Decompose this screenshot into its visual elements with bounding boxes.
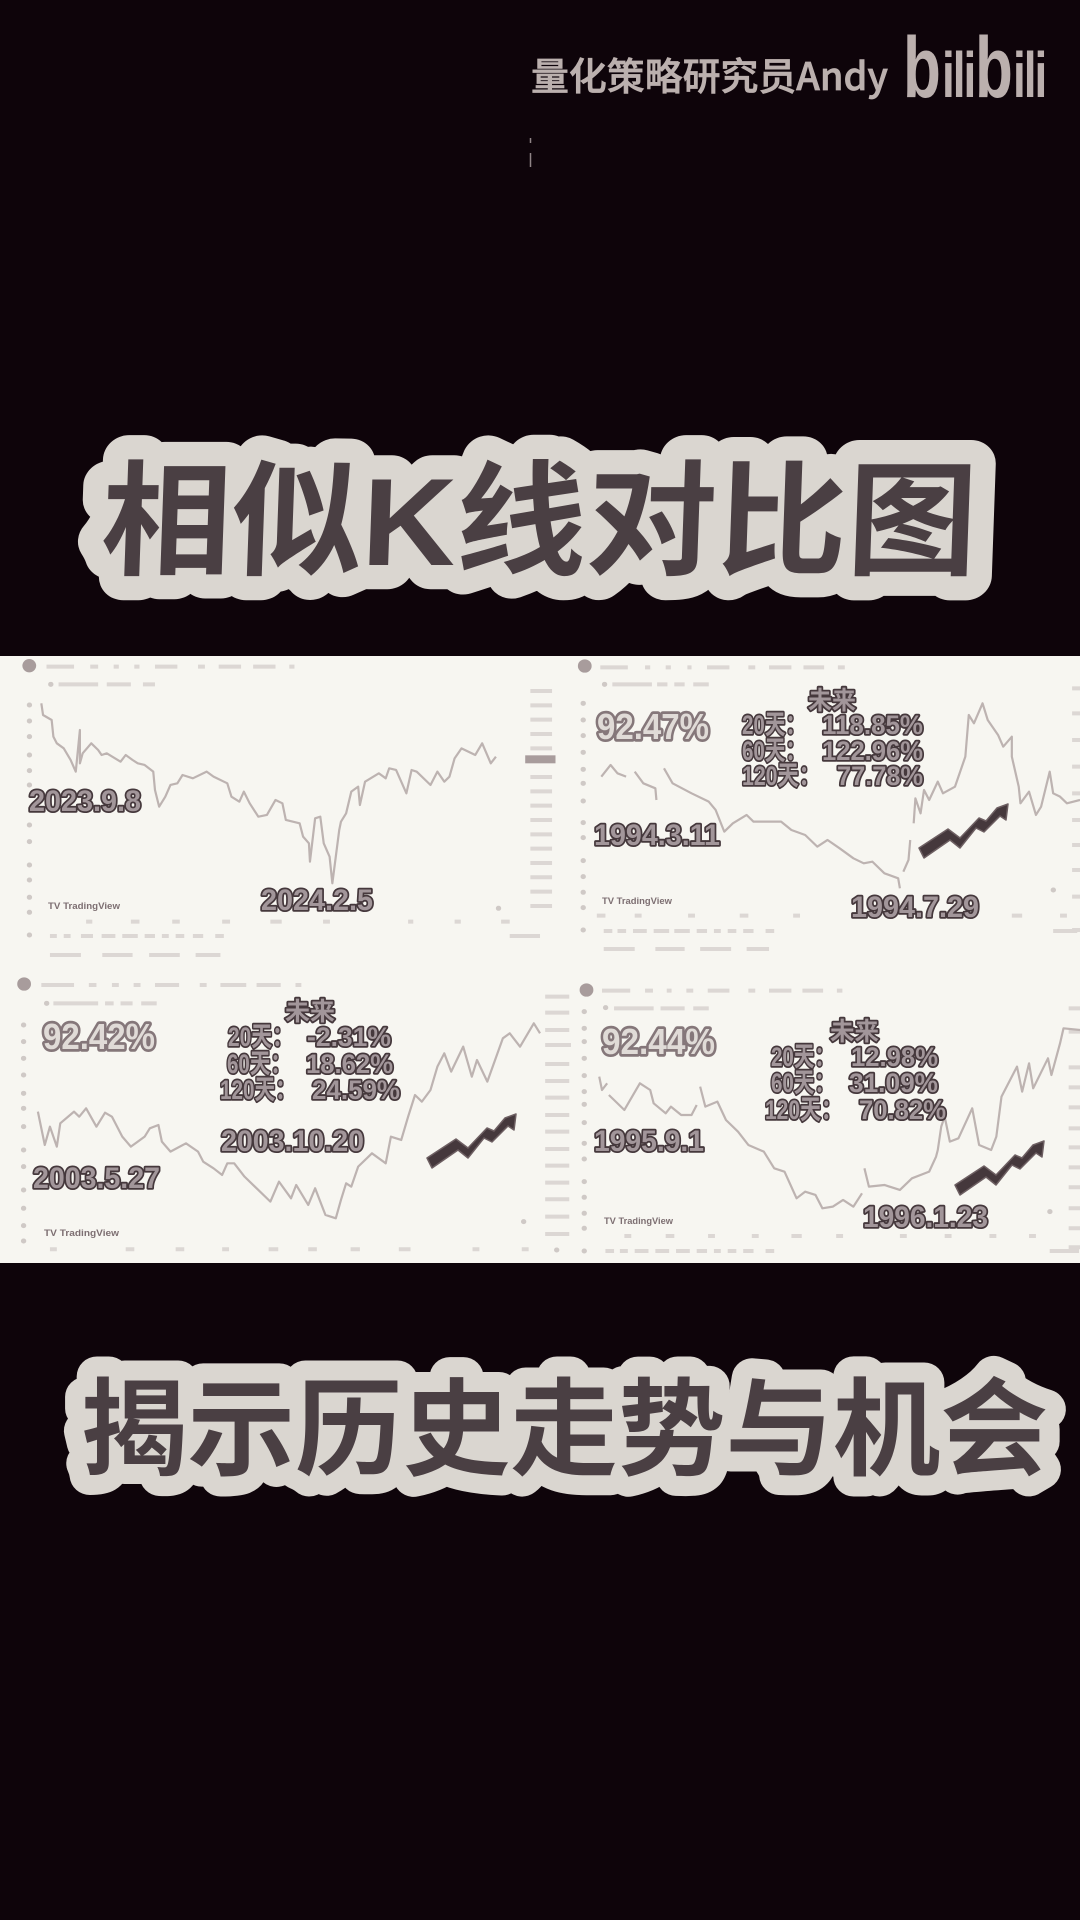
icon: bilibili logo: ili (1013, 40, 1045, 111)
icon: bilibili logo: ili (942, 40, 974, 111)
future returns table: 120天： (765, 1095, 842, 1125)
future returns table (765, 1018, 946, 1125)
future returns table: 120天： (742, 761, 820, 791)
date label: start: 1994.3.11 (594, 819, 720, 852)
future returns table: 122.96% (822, 736, 923, 766)
chart 4 interface chrome (545, 983, 1080, 1251)
future returns table (220, 998, 400, 1105)
future returns table: 70.82% (859, 1095, 946, 1125)
future returns table: 120天： (220, 1075, 296, 1105)
TradingView mark: TV TradingView (48, 901, 121, 911)
future returns table: 未来 (830, 1018, 879, 1046)
future returns table: 60天： (227, 1049, 291, 1079)
future returns table: 20天： (228, 1022, 293, 1052)
future returns table: 未来 (808, 687, 856, 715)
date label: end: 2003.10.20 (221, 1125, 364, 1158)
panel: chart comparison (0, 656, 1080, 1263)
date label: start: 1995.9.1 (594, 1125, 704, 1158)
similarity percentage: 92.47% (597, 706, 709, 747)
future returns table: 60天： (742, 736, 806, 766)
date label: start: 2003.5.27 (33, 1162, 160, 1195)
title: 相似K线对比图 (99, 453, 980, 592)
TradingView mark: TV TradingView (604, 1216, 674, 1226)
chart 3 interface chrome (17, 977, 540, 1249)
future returns table: 20天： (742, 710, 806, 740)
future returns table: 60天： (771, 1068, 835, 1098)
subtitle: 揭示历史走势与机会 (80, 1372, 1048, 1490)
future returns table: 118.85% (822, 710, 923, 740)
chart: 2023-2024 reference (22, 659, 540, 955)
future returns table: 18.62% (306, 1049, 393, 1079)
date label: start: 2023.9.8 (29, 785, 141, 818)
similarity percentage: 92.44% (602, 1021, 715, 1062)
icon: bilibili logo: b (975, 19, 1013, 115)
chart 1 interface chrome (22, 659, 540, 955)
future returns table: 未来 (285, 998, 335, 1026)
arrow: upward trend (919, 804, 1008, 858)
arrow: upward trend (427, 1114, 516, 1168)
date label: end: 1996.1.23 (863, 1201, 988, 1234)
TradingView mark: TV TradingView (44, 1228, 120, 1238)
watermark: author name: 量化策略研究员Andy (531, 46, 888, 101)
similarity percentage: 92.42% (43, 1016, 155, 1057)
date label: end: 2024.2.5 (261, 884, 373, 917)
future returns table: 24.59% (312, 1075, 400, 1105)
chart: 1995-1996 match (545, 983, 1080, 1251)
future returns table (742, 687, 923, 791)
date label: end: 1994.7.29 (851, 891, 979, 924)
future returns table: 77.78% (837, 761, 923, 791)
chart 2 interface chrome (540, 659, 1080, 949)
TradingView mark: TV TradingView (602, 896, 673, 906)
future returns table: 31.09% (849, 1068, 938, 1098)
future returns table: -2.31% (307, 1022, 391, 1052)
icon: bilibili logo: b (903, 19, 941, 115)
future returns table: 20天： (771, 1042, 835, 1072)
future returns table: 12.98% (851, 1042, 938, 1072)
small cursor mark (530, 138, 532, 167)
chart: 2003 match (17, 977, 540, 1249)
chart: 1994 match (540, 659, 1080, 949)
arrow: upward trend (955, 1141, 1044, 1195)
